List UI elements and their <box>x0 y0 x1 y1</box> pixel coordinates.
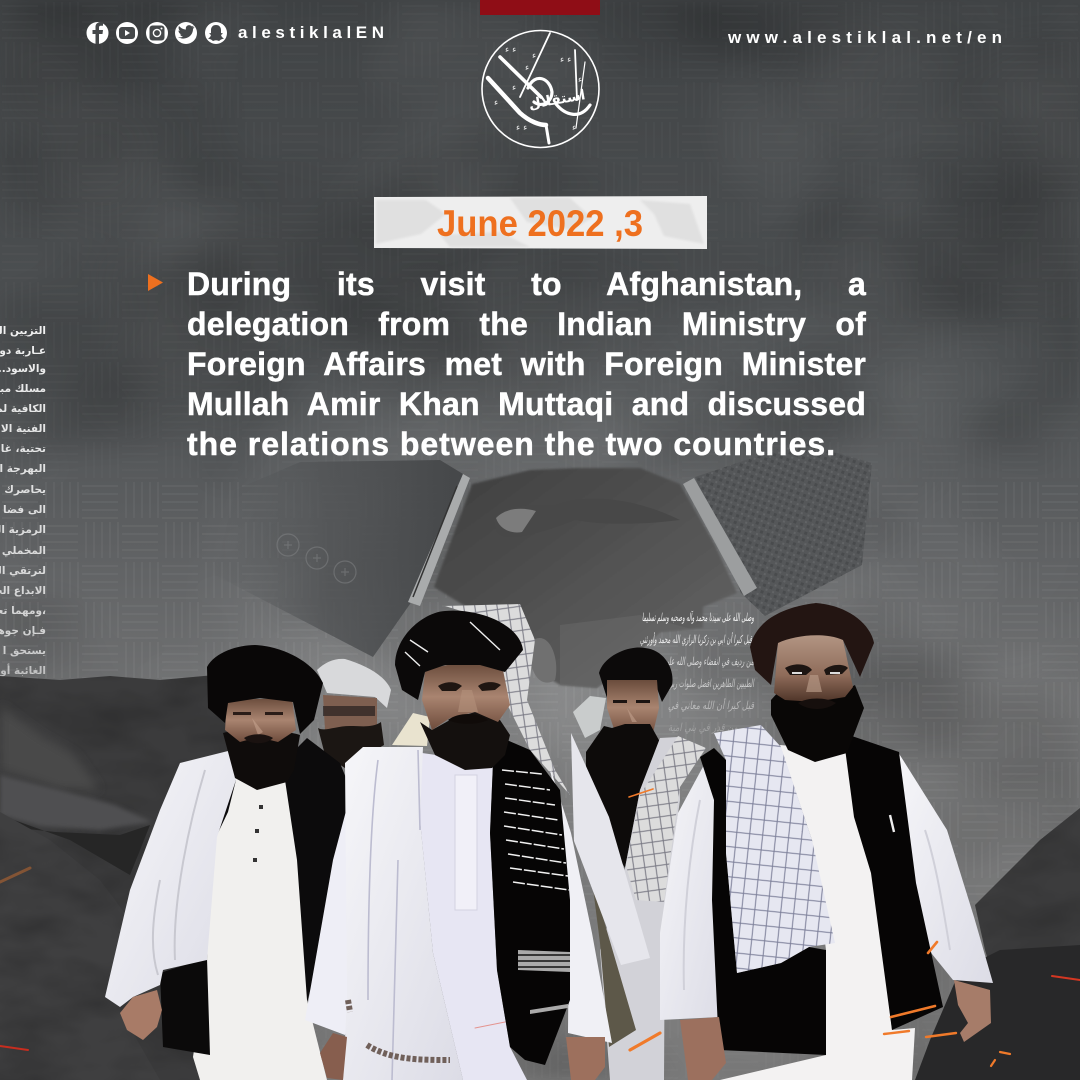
date label <box>374 196 707 249</box>
face <box>323 695 377 748</box>
lower fingers <box>560 615 695 688</box>
placket <box>455 775 477 910</box>
logo: Al-Estiklal calligraphy roundel: ء <box>572 123 576 133</box>
text: وصلى الله على سيدنا محمد وآله وصحبه وسلم تسليما <box>642 610 754 624</box>
right lower sleeve <box>550 767 612 1043</box>
text: قبل كبرا أن ابي بن زكريا الرازي الله محمد وأورثني <box>640 632 752 646</box>
main paragraph: Foreign Affairs met with Foreign Minister <box>187 346 866 382</box>
brown black turban <box>750 603 874 685</box>
scarf stripes <box>502 770 569 890</box>
lower black vest <box>160 958 210 1055</box>
right tweed sleeve <box>695 442 872 616</box>
date label: June 2022 ,3 <box>437 203 643 244</box>
clasped hands <box>434 468 737 688</box>
icon: youtube <box>119 27 135 39</box>
black beard and vest <box>586 724 672 868</box>
olive robe tail <box>592 880 636 1047</box>
beard <box>223 730 300 790</box>
calligraphy script behind the men: الطيبين الطاهرين افضل صلوات ربي <box>668 677 755 690</box>
white shirt <box>720 745 915 1080</box>
white turban <box>317 659 391 708</box>
social handle: alestiklalEN <box>238 23 384 42</box>
face <box>225 698 296 742</box>
logo: Al-Estiklal calligraphy roundel <box>482 30 599 148</box>
calligraphy script behind the men <box>640 610 755 734</box>
logo: Al-Estiklal calligraphy roundel: ء <box>532 51 536 61</box>
right man Muttaqi <box>660 603 993 1080</box>
arrow bullet <box>148 274 163 291</box>
calligraphy script behind the men: من قدر في بني امية <box>668 721 738 734</box>
right hand <box>566 1037 605 1080</box>
left hand <box>320 1033 347 1080</box>
pocket mark <box>890 815 894 832</box>
left shirt cuff <box>408 474 470 606</box>
icon: facebook <box>92 22 103 44</box>
right black vest <box>280 738 352 1060</box>
man left in black turban <box>105 645 352 1080</box>
left sleeve <box>660 750 725 1020</box>
calligraphic strokes <box>488 33 590 143</box>
black vest left <box>700 748 826 1055</box>
logo: Al-Estiklal calligraphy roundel: ء ء <box>516 123 527 133</box>
left suit sleeve <box>215 460 463 657</box>
website address: www.alestiklal.net/en <box>727 28 1002 47</box>
icon: instagram <box>150 26 164 40</box>
main paragraph: During its visit to Afghanistan, a <box>187 266 866 302</box>
hand <box>120 990 162 1040</box>
right hand <box>954 980 991 1042</box>
check scarf <box>626 736 706 902</box>
check scarf <box>714 725 835 973</box>
main paragraph: the relations between the two countries. <box>187 426 836 462</box>
left hand <box>680 1017 726 1080</box>
orange sparks <box>0 789 1080 1066</box>
icon: snapchat <box>208 25 224 41</box>
face <box>607 680 659 735</box>
beard <box>771 685 864 762</box>
right long panel <box>571 733 650 965</box>
black turban <box>207 645 323 734</box>
icon: twitter <box>178 25 194 39</box>
background man with check scarf <box>573 647 706 1080</box>
social media icons <box>86 22 227 44</box>
striped scarf behind <box>445 604 570 795</box>
mountains background <box>0 675 1080 1080</box>
black turban <box>395 611 523 700</box>
main paragraph: delegation from the Indian Ministry of <box>187 306 866 342</box>
main paragraph: Mullah Amir Khan Muttaqi and discussed <box>187 386 866 422</box>
right sleeve <box>898 752 993 983</box>
cream shawl <box>392 713 430 746</box>
main paragraph <box>187 266 866 462</box>
logo: Al-Estiklal calligraphy roundel: ء <box>494 98 498 108</box>
beard <box>420 712 510 770</box>
sleeve buttons <box>277 534 356 583</box>
logo: Al-Estiklal calligraphy roundel: ء <box>512 83 516 93</box>
black turban <box>599 647 673 702</box>
face <box>774 634 853 702</box>
logo: Al-Estiklal calligraphy roundel: استقلال <box>527 87 587 113</box>
black vest right <box>843 733 943 1030</box>
centre man Baradar <box>305 604 650 1080</box>
white drape <box>343 747 463 1080</box>
white turban behind <box>573 696 606 738</box>
embroidered border <box>348 1000 450 1060</box>
face <box>422 663 510 730</box>
calligraphy script behind the men: قبل كبرا أن الله معاني في <box>668 698 755 712</box>
shirt <box>420 753 527 1080</box>
logo: Al-Estiklal calligraphy roundel: ء ء <box>560 55 571 65</box>
glasses <box>323 706 375 716</box>
beard <box>318 722 384 768</box>
turban stripes <box>405 622 500 666</box>
left Arabic text column: عـاربة دو <box>0 345 46 357</box>
logo: Al-Estiklal calligraphy roundel: ء <box>578 75 582 85</box>
logo: Al-Estiklal calligraphy roundel: ء ء <box>505 45 516 55</box>
calligraphy script behind the men: من رديف في انفضاء وصلى الله عليه <box>664 655 754 668</box>
logo: Al-Estiklal calligraphy roundel: ء <box>525 63 529 73</box>
left Arabic text column <box>0 326 46 676</box>
left Arabic text column: يستحق ا <box>3 645 46 657</box>
left Arabic text column: الغائبة أو <box>0 663 46 677</box>
left sleeve <box>305 747 363 1035</box>
handshake photo <box>215 442 872 688</box>
thumb <box>494 499 680 537</box>
white robe <box>600 737 680 1080</box>
red top bar <box>480 0 600 15</box>
shirt buttons <box>253 805 263 862</box>
background man with glasses <box>317 659 391 768</box>
right shirt cuff <box>683 478 757 596</box>
white shirt <box>193 775 327 1080</box>
black striped scarf <box>490 737 570 1065</box>
white draped shawl <box>105 750 236 1007</box>
